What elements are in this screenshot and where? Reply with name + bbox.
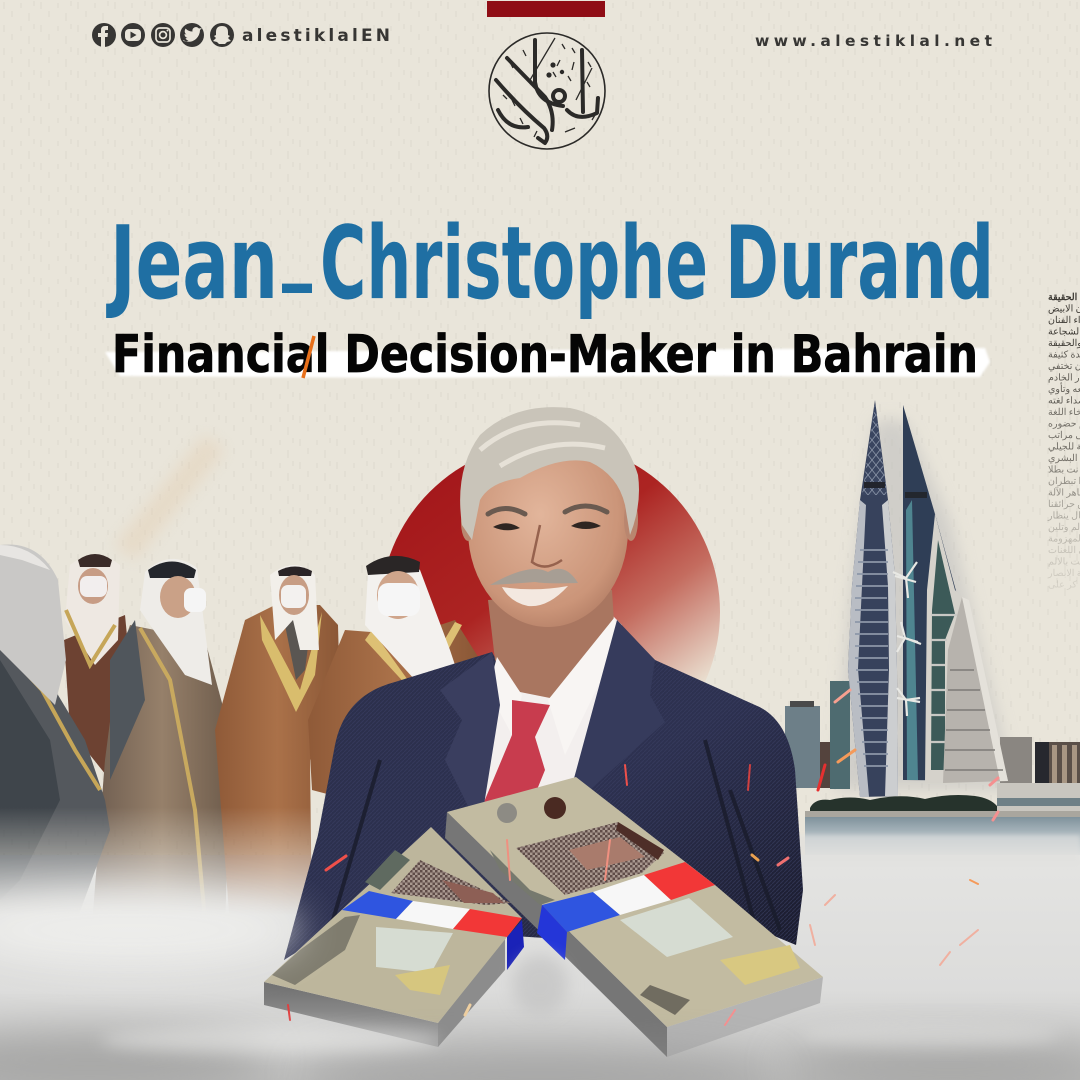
hair [460, 407, 639, 540]
water [805, 817, 1080, 859]
moustache [490, 569, 578, 585]
left band red [453, 909, 522, 937]
right band flap [537, 905, 567, 960]
social handle: alestiklalEN [242, 26, 390, 46]
subtitle spark [303, 336, 314, 378]
tower haze [835, 420, 1015, 790]
bahrain skyline [785, 400, 1080, 859]
shoreline [805, 811, 1080, 817]
man in suit [284, 407, 803, 960]
sleeve folds [330, 740, 780, 930]
background buildings [785, 681, 1080, 813]
collar left [488, 657, 522, 735]
right note ornament [640, 985, 690, 1015]
faded Arabic newspaper column: ر الخادم [1048, 372, 1080, 384]
faded Arabic newspaper column [1047, 292, 1080, 590]
left tower [848, 400, 898, 797]
right note scarf [516, 822, 664, 895]
left band blue [342, 891, 413, 919]
icon: snapchat [210, 23, 234, 47]
right note agal [616, 822, 664, 860]
icon: instagram [151, 23, 175, 47]
official in front right [308, 556, 480, 800]
eyes [493, 522, 601, 530]
red sun circle [380, 442, 720, 782]
title: Jean [106, 204, 278, 322]
title: Christophe [320, 204, 708, 322]
icon: youtube [121, 23, 145, 47]
left note ornament upper [365, 850, 410, 890]
nose [532, 525, 562, 567]
right tower [903, 405, 1008, 783]
suit weave [284, 625, 803, 960]
right band blue [542, 892, 620, 932]
right note pale window [620, 898, 733, 957]
right note gold [720, 945, 800, 985]
right stack side right [667, 977, 823, 1057]
faded Arabic newspaper column: نت بطلا [1048, 464, 1078, 476]
left stack side short [438, 937, 505, 1047]
eyebrows [488, 506, 607, 514]
official in tan robe [94, 559, 226, 904]
flying sparks [288, 690, 998, 1025]
left note face [442, 880, 504, 903]
face [468, 433, 628, 627]
collar right [548, 618, 620, 755]
lapel right [560, 620, 665, 830]
group of Gulf officials [0, 544, 480, 925]
suit jacket [284, 625, 803, 960]
left stack side long [264, 982, 438, 1047]
money stack left [264, 827, 524, 1047]
wind turbines [893, 562, 921, 716]
left ear [461, 503, 475, 541]
icon: facebook [92, 23, 116, 47]
left note ornament [272, 915, 360, 985]
right note emblem [544, 797, 566, 819]
official far back [64, 554, 127, 772]
faded Arabic newspaper column: كر على [1048, 580, 1077, 590]
money stack right [445, 777, 823, 1057]
red accent bar [487, 1, 605, 17]
tie [484, 700, 550, 802]
left note scarf [391, 860, 511, 905]
calligraphy logo seal [489, 33, 605, 149]
hair highlights [480, 423, 605, 466]
smile [502, 586, 568, 606]
waterfront trees [810, 795, 997, 812]
warm light streak [115, 435, 225, 560]
right ear [624, 499, 638, 541]
social icons [92, 23, 234, 47]
ground fog base [0, 855, 1080, 1080]
right band red [644, 862, 715, 900]
title [106, 175, 994, 322]
official in foreground left [0, 544, 110, 925]
subtitle white brush [105, 348, 990, 378]
right note face [569, 837, 645, 870]
website address: www.alestiklal.net [755, 32, 993, 50]
left note pale window [376, 927, 453, 973]
neck [488, 590, 614, 698]
right band white [593, 875, 671, 915]
official in brown bisht [215, 565, 340, 925]
icon: twitter [180, 23, 204, 47]
right stack side left [445, 812, 667, 1057]
right note ornament upper [490, 850, 555, 905]
right note seal [497, 803, 517, 823]
foreground fog clouds [0, 895, 1080, 1080]
lapel left [440, 652, 500, 830]
left note gold [395, 965, 450, 995]
left band side [507, 920, 524, 970]
left stack banknote [264, 827, 522, 1023]
title: _ [282, 175, 312, 293]
shirt [482, 615, 622, 805]
right stack banknote [447, 777, 823, 1027]
left band white [396, 901, 470, 929]
